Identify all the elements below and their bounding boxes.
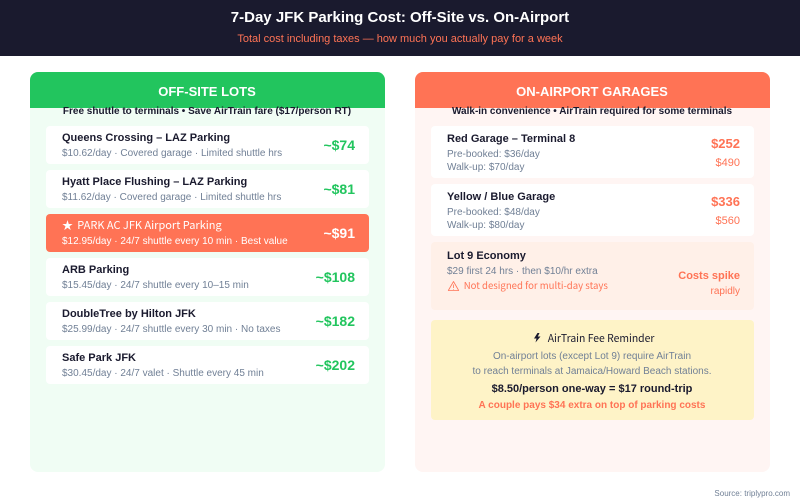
card: Yellow / Blue Garage: $336 [711, 194, 740, 209]
card: Yellow / Blue Garage: Walk-up: $80/day [447, 220, 524, 231]
card: Hyatt Place: Hyatt Place Flushing – LAZ Parking [62, 176, 247, 188]
card: PARK AC highlighted [46, 214, 369, 252]
off-site tagline: Free shuttle to terminals • Save AirTrain fare ($17/person RT) [63, 106, 351, 117]
card: PARK AC highlighted: ★ [62, 217, 73, 233]
card: Yellow / Blue Garage: Pre-booked: $48/day [447, 207, 540, 218]
card: Red Garage: Red Garage – Terminal 8 [447, 133, 575, 145]
card: Lot 9 Economy [431, 242, 754, 310]
subtitle: Total cost including taxes — how much you actually pay for a week [237, 33, 563, 45]
card: Lot 9 Economy: rapidly [711, 286, 740, 297]
card: Lot 9 Economy: Costs spike [678, 270, 740, 282]
card: ARB Parking [46, 258, 369, 296]
card: PARK AC highlighted: $12.95/day · 24/7 shuttle every 10 min · Best value [62, 236, 288, 247]
card: Safe Park: $30.45/day · 24/7 valet · Shuttle every 45 min [62, 368, 264, 379]
card: Hyatt Place: ~$81 [323, 181, 355, 197]
card: Safe Park [46, 346, 369, 384]
panel: off-site lots [30, 72, 385, 472]
card: DoubleTree: DoubleTree by Hilton JFK [62, 308, 196, 320]
callout: AirTrain fee reminder: A couple pays $34 extra on top of parking costs [479, 400, 706, 411]
off-site heading: OFF-SITE LOTS [158, 84, 256, 99]
header banner [0, 0, 800, 56]
callout: AirTrain fee reminder [431, 320, 754, 420]
panel: on-airport garages [415, 72, 770, 472]
callout: AirTrain fee reminder: to reach terminals at Jamaica/Howard Beach stations. [472, 366, 712, 377]
card: DoubleTree: ~$182 [316, 313, 355, 329]
on-airport heading: ON-AIRPORT GARAGES [516, 84, 668, 99]
card: Red Garage [431, 126, 754, 178]
source note: Source: triplypro.com [714, 489, 790, 498]
callout: AirTrain fee reminder: AirTrain Fee Reminder [548, 330, 655, 345]
card: Hyatt Place: $11.62/day · Covered garage · Limited shuttle hrs [62, 192, 281, 203]
card: Red Garage: $252 [711, 136, 740, 151]
card: Queens Crossing [46, 126, 369, 164]
icon: warning triangle [448, 282, 459, 290]
card: ARB Parking: $15.45/day · 24/7 shuttle every 10–15 min [62, 280, 249, 291]
card: Red Garage: $490 [716, 157, 740, 169]
card: Lot 9 Economy: Not designed for multi-day stays [464, 278, 608, 292]
title: 7-Day JFK Parking Cost: Off-Site vs. On-Airport [231, 9, 569, 26]
card: Hyatt Place [46, 170, 369, 208]
card: ARB Parking: ARB Parking [62, 264, 129, 276]
icon: lightning bolt [534, 333, 540, 342]
card: Lot 9 Economy: Lot 9 Economy [447, 250, 527, 262]
card: Yellow / Blue Garage [431, 184, 754, 236]
card: Lot 9 Economy: $29 first 24 hrs · then $10/hr extra [447, 266, 598, 277]
card: PARK AC highlighted: PARK AC JFK Airport Parking [77, 217, 223, 233]
callout: AirTrain fee reminder: On-airport lots (except Lot 9) require AirTrain [493, 351, 691, 362]
card: Yellow / Blue Garage: $560 [716, 215, 740, 227]
card: Queens Crossing: Queens Crossing – LAZ Parking [62, 132, 230, 144]
card: ARB Parking: ~$108 [316, 269, 355, 285]
card: PARK AC highlighted: ~$91 [323, 225, 355, 241]
card: DoubleTree [46, 302, 369, 340]
callout: AirTrain fee reminder: $8.50/person one-way = $17 round-trip [492, 383, 693, 395]
card: Queens Crossing: ~$74 [323, 137, 355, 153]
card: Red Garage: Walk-up: $70/day [447, 162, 524, 173]
card: Safe Park: Safe Park JFK [62, 352, 136, 364]
card: Yellow / Blue Garage: Yellow / Blue Garage [447, 191, 555, 203]
card: DoubleTree: $25.99/day · 24/7 shuttle every 30 min · No taxes [62, 324, 280, 335]
card: Safe Park: ~$202 [316, 357, 355, 373]
card: Red Garage: Pre-booked: $36/day [447, 149, 540, 160]
card: Queens Crossing: $10.62/day · Covered garage · Limited shuttle hrs [62, 148, 282, 159]
on-airport tagline: Walk-in convenience • AirTrain required for some terminals [452, 106, 732, 117]
